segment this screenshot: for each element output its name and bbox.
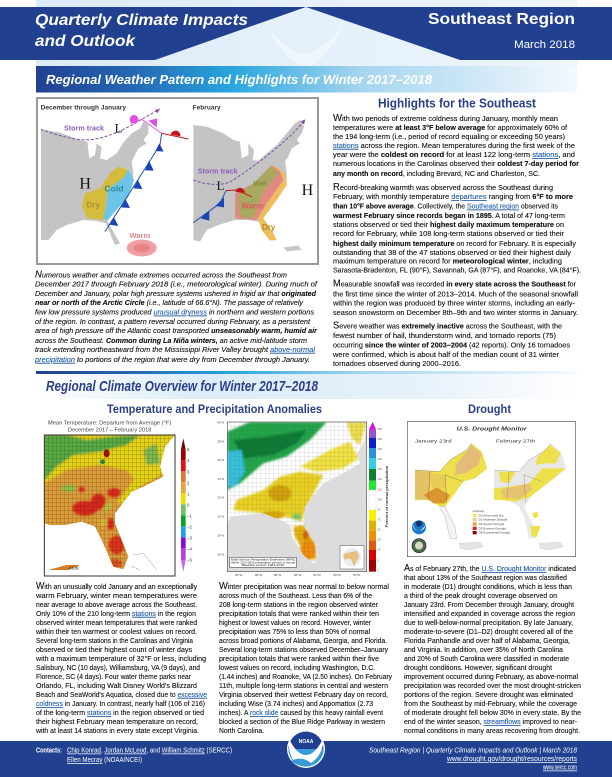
text: drought narrative: As of February 27th, the U.S. Drought Monitor indicated <box>404 563 576 574</box>
legend: precipitation colour bar: 150 <box>378 468 382 471</box>
legend: temperature colour bar: 3 <box>187 469 190 474</box>
text: temperature narrative: within their ten warmest or coolest values on record. <box>35 627 197 636</box>
legend: drought categories: D1 Moderate Drought <box>479 518 508 522</box>
legend: precipitation colour bar: 10 <box>378 549 381 552</box>
footer: contacts <box>36 746 232 764</box>
legend: temperature colour bar: −1 <box>187 513 193 518</box>
text: drought narrative: from the Southeast by mid-February, while the coverage <box>404 699 577 708</box>
panel: drought monitor <box>407 422 576 557</box>
text: drought narrative: intensified and expanded in coverage across the region <box>404 609 575 618</box>
text: highlights: outstanding that 38 of the 47 stations observed or tied their highest daily <box>333 248 571 257</box>
section bar: weather pattern: Regional Weather Pattern and Highlights for Winter 2017–2018 <box>46 73 432 87</box>
right map: February: Warm <box>241 201 263 210</box>
text: drought narrative: moderate-to-severe (D1–D2) drought covered all of the <box>404 627 573 636</box>
divider bar <box>36 371 577 374</box>
legend: temperature colour bar: −4 <box>187 547 193 552</box>
text: precipitation narrative <box>219 581 392 735</box>
text: precipitation narrative: 11th, multiple long-term stations in central and western <box>219 681 388 690</box>
legend: precipitation colour bar <box>369 422 389 573</box>
right map: February: L <box>217 179 224 193</box>
puerto rico insets <box>459 542 563 550</box>
chart: temperature departure map: ACIS <box>67 565 79 570</box>
map: February 27th <box>494 443 566 538</box>
icon: NOAA logo: NOAA <box>299 739 314 745</box>
legend: temperature colour bar <box>181 438 193 572</box>
text: temperature narrative: With an unusually cold January and an exceptionally <box>36 581 197 592</box>
text: weather narrative: December and January, polar high pressure systems ushered in frigid air that originated <box>35 289 316 298</box>
region and date: Southeast Region <box>428 11 575 28</box>
chart: precipitation percent of normal map: 82°W <box>313 573 321 577</box>
text: precipitation narrative: including Wise (3.74 inches) and Appomattox (2.73 <box>219 699 373 708</box>
text: highlights <box>332 113 581 368</box>
right map: February: February <box>193 105 221 111</box>
legend: drought categories: D4 Exceptional Drought <box>479 531 510 535</box>
text: drought narrative: precipitation was recorded over the most drought-stricken <box>404 681 581 690</box>
region and date <box>428 11 575 51</box>
header band <box>0 7 612 68</box>
chart: temperature departure map <box>44 420 175 576</box>
legend: drought categories: D3 Extreme Drought <box>479 526 506 530</box>
panel: drought monitor: January 23rd <box>415 438 452 444</box>
text: temperature narrative: near average to above average across the Southeast. <box>36 600 197 609</box>
text: weather narrative <box>34 270 318 364</box>
icon: NOAA seal <box>412 520 426 534</box>
text: highlights: stations across the region. Mean temperatures during the first week of the <box>333 141 575 150</box>
text: highlights: year were the coldest on record for at least 122 long-term stations, and <box>333 150 575 159</box>
text: precipitation narrative: blocked a section of the Blue Ridge Parkway in western <box>219 717 385 726</box>
text: highlights: numerous locations in the Carolinas observed their coldest 7-day period for <box>333 159 579 168</box>
legend: drought categories: D0 Abnormally Dry <box>479 513 504 517</box>
text: temperature narrative: their highest February mean temperature on record, <box>36 717 198 726</box>
heading: drought: Drought <box>468 402 511 416</box>
text: highlights: temperatures were at least 3°F below average for approximately 60% of <box>333 123 568 132</box>
text: temperature narrative <box>35 581 207 735</box>
text: drought narrative: due to well-below-normal precipitation. By late January, <box>404 618 573 627</box>
text: drought narrative: of moderate drought fell below 30% in every state. By the <box>404 708 581 717</box>
text: temperature narrative: Only 10% of the 210 long-term stations in the region <box>36 609 196 618</box>
heading: temperature and precipitation: Temperature and Precipitation Anomalies <box>107 402 322 416</box>
left map: December through January: December through January <box>41 105 127 111</box>
text: temperature narrative: of the long-term stations in the region observed or tied <box>36 708 204 717</box>
legend: precipitation colour bar: 300 <box>378 448 382 451</box>
text: highlights: fewest number of hail, thunderstorm wind, and tornado reports (75) <box>333 331 556 340</box>
text: precipitation narrative: Virginia observed their wettest February day on record, <box>219 690 388 699</box>
footer band <box>0 741 612 777</box>
right map: February: H <box>302 182 314 199</box>
left map: December through January: Storm track <box>64 126 104 133</box>
footer: publication links: www.sercc.com <box>542 762 577 772</box>
right map: February: Storm track <box>198 169 238 176</box>
chart: precipitation percent of normal map: 84°W <box>294 573 302 577</box>
text: precipitation narrative: highest or lowest values on record. However, winter <box>219 618 371 627</box>
text: precipitation narrative: Several long-term stations observed December–January <box>219 645 388 654</box>
text: precipitation narrative: across broad portions of Alabama, Georgia, and Florida. <box>219 636 387 645</box>
text: temperature narrative: Orlando, FL, including Walt Disney World's Blizzard <box>36 681 197 690</box>
legend: precipitation colour bar: 400 <box>378 438 382 441</box>
text: highlights: than 10°F above average. Collectively, the Southeast region observed its <box>333 202 558 210</box>
text: drought narrative: that about 13% of the Southeast region was classified <box>404 573 567 582</box>
icon: bird emblem <box>268 24 343 68</box>
text: precipitation narrative: 208 long-term stations in the region observed winter <box>219 600 378 609</box>
text: weather narrative: across the Southeast. Common during La Niña winters, an active mid-latitude storm <box>35 336 308 345</box>
footer: publication links: Southeast Region | Quarterly Climate Impacts and Outlook | March 2018 <box>369 746 578 754</box>
chart: precipitation percent of normal map: 90°W <box>235 573 243 577</box>
chart: precipitation percent of normal map: 40°N <box>217 420 224 424</box>
panel: drought monitor: U.S. Drought Monitor <box>457 426 528 432</box>
right map: February: Dry <box>262 223 276 232</box>
left map: December through January: Warm <box>129 231 151 240</box>
inset: region locator <box>340 546 364 569</box>
text: highlights: the first time since the winter of 2013–2014. Much of the seasonal snowfall <box>333 290 578 298</box>
text: drought narrative: normal conditions in many areas recovering from drought. <box>404 726 580 735</box>
legend: temperature colour bar: 0 <box>187 502 190 507</box>
text: precipitation narrative: inches). A rock slide caused by this heavy rainfall event <box>219 708 384 717</box>
text: temperature narrative: with at least 14 stations in every state except Virginia. <box>35 726 199 735</box>
note box: Baseline period: 1981-2010 <box>242 563 285 567</box>
legend: drought categories: Intensity: <box>473 509 485 513</box>
legend: drought categories: D2 Severe Drought <box>479 522 504 526</box>
header: light backdrop <box>36 0 577 66</box>
text: drought narrative: and Virginia. In addition, over 35% of North Carolina <box>404 645 564 654</box>
chart: precipitation percent of normal map: 32°N <box>217 496 224 500</box>
panel: weather pattern maps <box>37 98 318 264</box>
legend: precipitation colour bar: 25 <box>378 539 381 542</box>
footer: publication links: www.drought.gov/drought/resources/reports <box>446 754 577 763</box>
text: drought narrative: and 20% of South Carolina were classified in moderate <box>404 654 569 663</box>
text: highlights: were confirmed, which is about half of the median count of 31 winter <box>332 350 559 359</box>
text: drought narrative: in moderate (D1) drought conditions, which is less than <box>404 582 572 591</box>
text: drought narrative: improvement occurred during February, as above-normal <box>404 672 578 681</box>
left map: December through January <box>41 105 188 256</box>
section heading: climate overview: Regional Climate Overview for Winter 2017–2018 <box>46 378 319 395</box>
legend: precipitation colour bar: 50 <box>378 529 381 532</box>
footer: publication links <box>369 746 578 772</box>
text: precipitation narrative: precipitation totals that were ranked within their ten <box>219 609 379 618</box>
text: highlights: Measurable snowfall was recorded in every state across the Southeast for <box>333 278 576 290</box>
text: weather narrative: near or north of the Arctic Circle (i.e., latitude of 66.6°N). The passage of relatively <box>35 298 304 307</box>
note box: Winter 2017-2018 precipitation percent of normal <box>231 560 295 564</box>
note box <box>230 557 296 567</box>
section heading: climate overview <box>36 374 577 399</box>
text: temperature narrative: Beach and SeaWorld's Aquatica, closed due to excessive <box>36 690 207 699</box>
text: temperature narrative: with a maximum temperature of 32°F or less, including <box>35 654 206 663</box>
icon: USDA seal <box>412 539 426 553</box>
title: and Outlook <box>35 33 137 50</box>
legend: temperature colour bar: 4 <box>187 458 190 463</box>
chart: precipitation percent of normal map: 38°N <box>217 439 224 443</box>
chart: precipitation percent of normal map: 86°W <box>274 573 282 577</box>
text: temperature narrative: Florence, SC (4 days). Four water theme parks near <box>36 672 191 681</box>
note box: Multi-Sensor Precipitation Estimates (MPE) <box>231 558 295 562</box>
text: precipitation narrative: across much of the Southeast. Less than 6% of the <box>219 591 372 600</box>
text: precipitation narrative: lowest values on record, including Washington, D.C. <box>219 663 375 672</box>
right map: February: Wet <box>253 179 267 188</box>
chart: precipitation percent of normal map: 88°W <box>255 573 263 577</box>
text: highlights: within the region was produced by three winter storms, including an early- <box>332 298 575 308</box>
text: drought narrative: portions of the region. Severe drought was eliminated <box>404 690 573 699</box>
heading: highlights: Highlights for the Southeast <box>378 96 537 110</box>
chart: temperature departure map: Mean Temperature: Departure from Average (°F) <box>48 420 172 426</box>
text: highlights: stations observed or tied their highest daily maximum temperature on <box>333 220 564 229</box>
footer: contacts: Ellen Mecray (NOAA/NCEI) <box>67 755 142 764</box>
text: temperature narrative: coldness in January. In contrast, nearly half (106 of 216) <box>36 699 205 708</box>
text: highlights: highest daily minimum temperature on record for February. It is especially <box>333 239 576 248</box>
text: temperature narrative: observed winter mean temperatures that were ranked <box>36 618 197 627</box>
text: highlights: With two periods of extreme coldness during January, monthly mean <box>333 113 558 124</box>
footer: contacts: Chip Konrad, Jordan McLeod, and William Schmitz (SERCC) <box>67 746 232 754</box>
text: weather narrative: precipitation to portions of the region that were dry from December through January. <box>34 355 310 364</box>
text: highlights: February, with monthly temperature departures ranging from 6°F to more <box>333 192 574 201</box>
legend: precipitation colour bar: 500 <box>378 428 382 431</box>
legend: temperature colour bar: −3 <box>187 536 193 541</box>
text: temperature narrative: Salisbury, NC (10 days), Williamsburg, VA (9 days), and <box>36 663 200 672</box>
left map: December through January: Dry <box>87 200 101 209</box>
text: drought narrative: a third of the peak drought coverage observed on <box>404 591 557 600</box>
left map: December through January: Cold <box>104 183 124 193</box>
text: weather narrative: few low pressure systems produced unusual dryness in northern and western portions <box>35 308 314 316</box>
text: highlights: occurring since the winter of 2003–2004 (42 reports). Only 16 tornadoes <box>333 340 570 350</box>
text: highlights: maximum temperature on record for meteorological winter, including <box>333 256 562 266</box>
chart: precipitation percent of normal map: 78°W <box>353 573 360 577</box>
text: weather narrative: track extending northeastward from the Mississippi River Valley brought above-normal <box>35 345 315 354</box>
text: weather narrative: Numerous weather and climate extremes occurred across the Southeast from <box>35 270 288 280</box>
chart: precipitation percent of normal map: 30°N <box>217 515 224 519</box>
text: drought narrative <box>404 563 581 735</box>
text: highlights: Severe weather was extremely inactive across the Southeast, with the <box>333 320 562 332</box>
legend: temperature colour bar: 5 <box>187 447 190 452</box>
text: precipitation narrative: Winter precipitation was near normal to below normal <box>219 581 389 592</box>
icon: NOAA logo <box>287 730 325 768</box>
legend: precipitation colour bar: 200 <box>378 458 382 461</box>
right map: February <box>193 105 314 251</box>
text: highlights: record for February, while 108 long-term stations observed or tied their <box>333 229 564 238</box>
chart: precipitation percent of normal map: 80°W <box>333 573 341 577</box>
text: drought narrative: end of the winter season, streamflows improved to near- <box>404 717 577 726</box>
chart: precipitation percent of normal map: 36°N <box>217 458 224 462</box>
chart: precipitation percent of normal map <box>217 420 367 577</box>
text: drought narrative: Florida Panhandle and over half of Alabama, Georgia, <box>404 636 570 645</box>
legend: temperature colour bar: −2 <box>187 525 193 530</box>
text: temperature narrative: Several long-term stations in the Carolinas and Virginia <box>36 636 194 645</box>
chart: precipitation percent of normal map: 26°N <box>217 552 224 556</box>
text: precipitation narrative: (1.44 inches) and Roanoke, VA (2.50 inches). On February <box>219 672 392 681</box>
text: highlights: Record-breaking warmth was observed across the Southeast during <box>333 182 553 193</box>
text: precipitation narrative: precipitation totals that were ranked within their five <box>219 654 379 663</box>
text: drought narrative: drought conditions. However, significant drought <box>404 663 553 672</box>
text: precipitation narrative: North Carolina. <box>219 726 264 735</box>
legend: precipitation colour bar: 100 <box>378 499 382 502</box>
legend: precipitation colour bar: 110 <box>378 489 382 492</box>
text: temperature narrative: observed or tied their highest count of winter days <box>36 645 192 654</box>
region and date: March 2018 <box>514 39 575 51</box>
left map: December through January: H <box>79 175 91 192</box>
legend: temperature colour bar: 1 <box>187 491 190 496</box>
legend: precipitation colour bar: 0 <box>378 570 380 573</box>
text: weather narrative: of the region. In contrast, a pattern reversal occurred during February, as a persistent <box>35 317 311 326</box>
text: highlights: any month on record, including Brevard, NC and Charleston, SC. <box>333 169 540 178</box>
footer: contacts: Contacts: <box>36 746 62 754</box>
legend: precipitation colour bar: Percent of normal precipitation <box>385 466 389 527</box>
text: highlights: the 194 long-term (i.e., period of record equaling or exceeding 50 years) <box>333 132 565 141</box>
section bar: weather pattern <box>36 66 577 92</box>
panel: drought monitor: February 27th <box>496 438 536 444</box>
legend: precipitation colour bar: 5 <box>378 559 380 562</box>
text: highlights: Sarasota-Bradenton, FL (90°F), Savannah, GA (87°F), and Roanoke, VA (84°F). <box>333 266 581 274</box>
chart: precipitation percent of normal map: 34°N <box>217 477 224 481</box>
text: precipitation narrative: precipitation was 75% to less than 50% of normal <box>219 627 370 636</box>
text: highlights: season snowstorm on December 8th–9th and two winter storms in January. <box>333 308 578 317</box>
map: January 23rd <box>415 443 487 538</box>
text: highlights: tornadoes observed during 2000–2016. <box>333 359 461 368</box>
legend: temperature colour bar: 2 <box>187 480 190 485</box>
legend: drought categories <box>473 509 510 535</box>
text: weather narrative: December 2017 through February 2018 (i.e., meteorological winter). During much of <box>35 280 318 288</box>
legend: precipitation colour bar: 75 <box>378 519 381 522</box>
chart: temperature departure map: December 2017 – February 2018 <box>68 427 151 433</box>
chart: precipitation percent of normal map: 28°N <box>217 534 224 538</box>
title <box>35 12 248 50</box>
text: highlights: warmest February since records began in 1895. A total of 47 long-term <box>332 211 565 220</box>
legend: precipitation colour bar: 130 <box>378 478 382 481</box>
text: drought narrative: January 23rd. From December through January, drought <box>404 600 575 609</box>
text: weather narrative: area of high pressure off the Atlantic coast transported unseasonably warm, humid air <box>35 326 318 335</box>
legend: temperature colour bar: −5 <box>187 558 193 563</box>
text: temperature narrative: warm February, winter mean temperatures were <box>35 591 197 600</box>
title: Quarterly Climate Impacts <box>35 12 248 29</box>
left map: December through January: L <box>115 122 122 136</box>
legend: precipitation colour bar: 90 <box>378 509 381 512</box>
